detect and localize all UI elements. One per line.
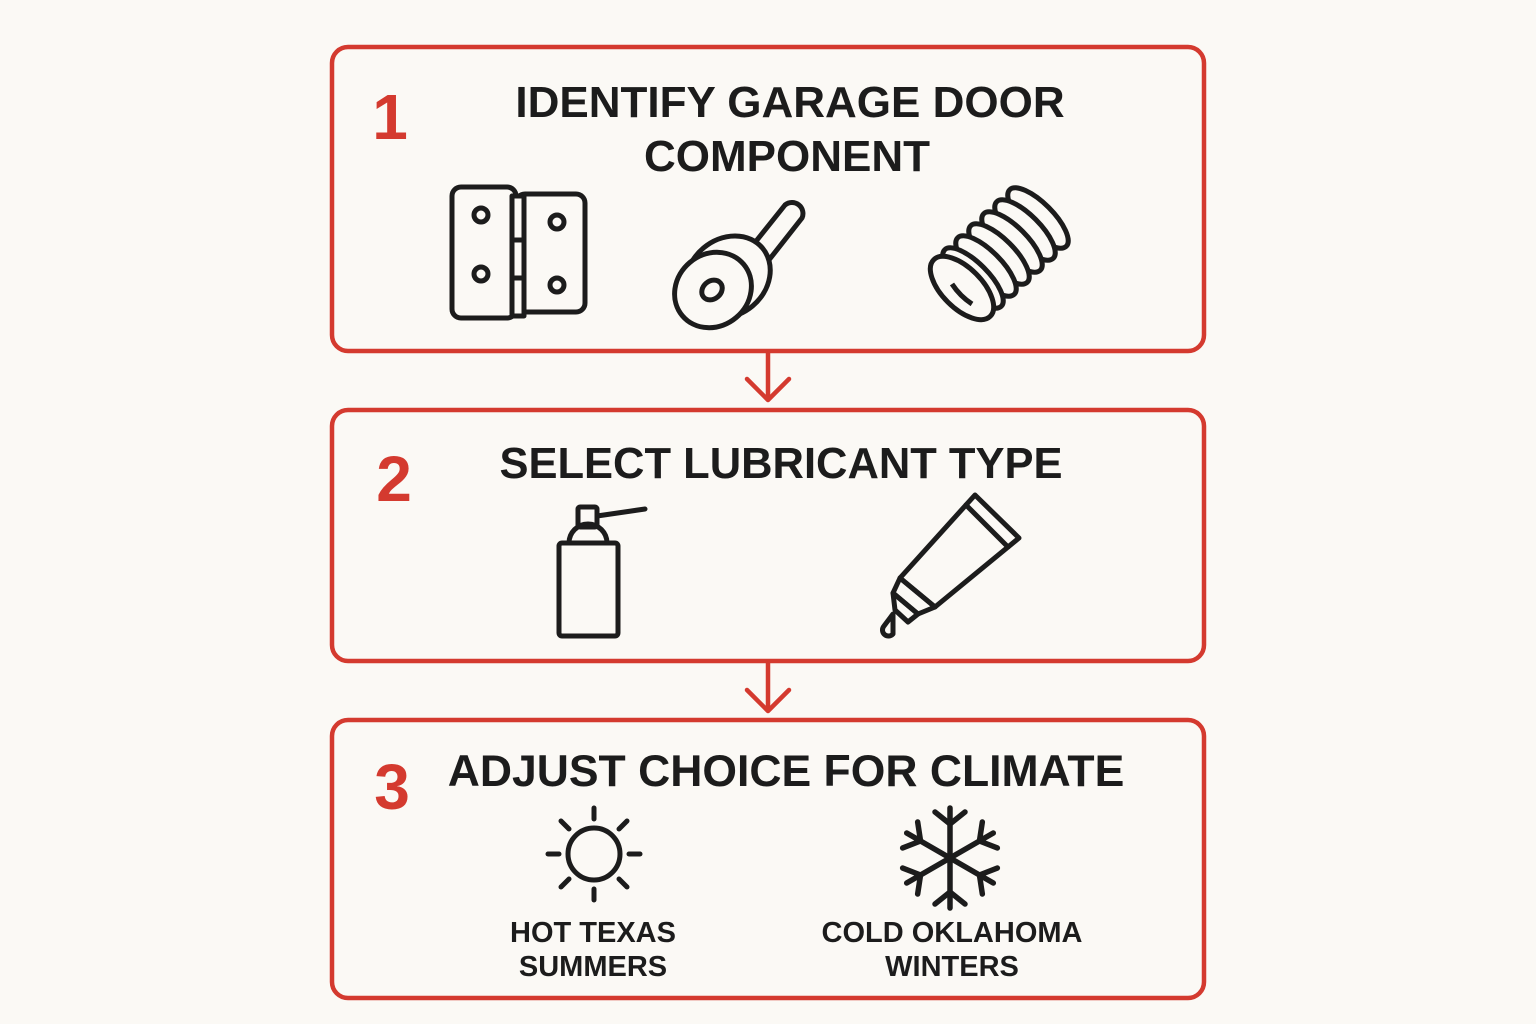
number 2: 2 — [376, 443, 412, 515]
label: cold oklahoma winters: WINTERS — [885, 951, 1019, 983]
label: cold oklahoma winters: COLD OKLAHOMA — [822, 917, 1082, 949]
number 3: 3 — [374, 751, 410, 823]
label: hot texas summers: SUMMERS — [519, 951, 667, 983]
heading 1: IDENTIFY GARAGE DOOR — [515, 78, 1065, 127]
icon: roller — [659, 203, 803, 343]
arrow 1 to 2 — [747, 352, 789, 400]
icon: spray can — [559, 507, 645, 636]
panel: step 2 select lubricant — [332, 410, 1204, 661]
icon: spring — [920, 179, 1077, 330]
number 1: 1 — [372, 81, 408, 153]
arrow 2 to 3 — [747, 662, 789, 711]
panel: step 1 identify component — [332, 47, 1204, 351]
icon: snowflake — [899, 808, 1001, 908]
label: hot texas summers: HOT TEXAS — [510, 917, 676, 949]
heading 3: ADJUST CHOICE FOR CLIMATE — [448, 747, 1124, 796]
heading 1: COMPONENT — [644, 132, 930, 181]
icon: hinge — [452, 187, 585, 318]
icon: sun — [548, 808, 640, 900]
icon: grease tube — [882, 495, 1019, 636]
heading 2: SELECT LUBRICANT TYPE — [499, 440, 1063, 488]
panel: step 3 climate — [332, 720, 1204, 998]
